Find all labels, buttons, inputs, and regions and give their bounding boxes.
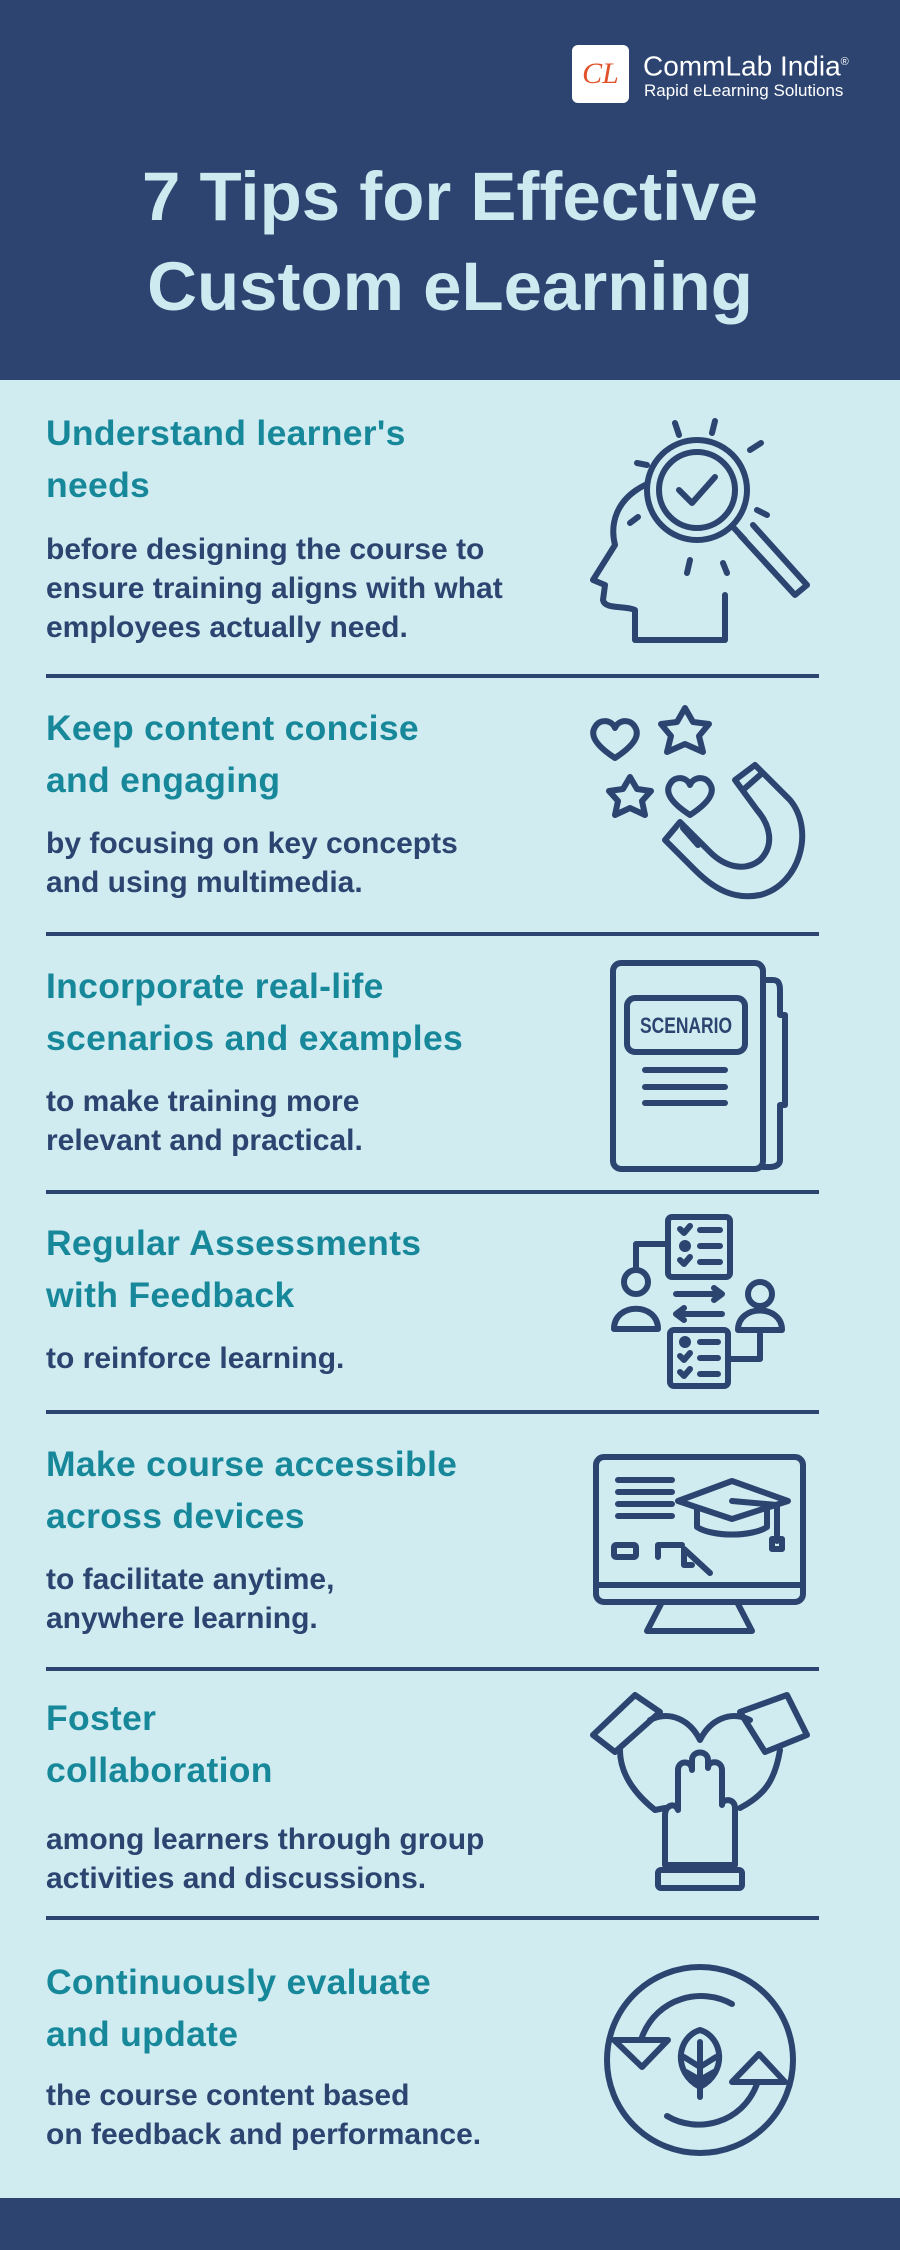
logo icon: CL bbox=[582, 57, 619, 90]
tip 2 heading: Keep content concise bbox=[46, 708, 419, 748]
tip 2 text: and using multimedia. bbox=[46, 866, 363, 899]
logo tagline: Rapid eLearning Solutions bbox=[644, 81, 843, 100]
tip 1 text: before designing the course to bbox=[46, 533, 484, 566]
tip 3 text bbox=[46, 1085, 363, 1157]
tip 5 text bbox=[46, 1563, 334, 1635]
tip 2 text: by focusing on key concepts bbox=[46, 827, 458, 860]
tip 3 heading bbox=[46, 966, 463, 1058]
logo name: CommLab India® bbox=[643, 50, 849, 81]
icon: monitor with cap bbox=[593, 1454, 806, 1634]
tip 3 text: to make training more bbox=[46, 1085, 359, 1118]
tip 1 heading: needs bbox=[46, 465, 150, 505]
title: Custom eLearning bbox=[147, 248, 753, 325]
tip 4 text: to reinforce learning. bbox=[46, 1342, 344, 1375]
tip 4 heading: with Feedback bbox=[46, 1275, 295, 1315]
tip 1 text bbox=[46, 533, 503, 644]
tip 5 text: to facilitate anytime, bbox=[46, 1563, 334, 1596]
tip 5 heading bbox=[46, 1444, 457, 1536]
title: 7 Tips for Effective bbox=[142, 158, 758, 235]
tip 1 heading bbox=[46, 413, 406, 505]
tip 6 heading: collaboration bbox=[46, 1750, 273, 1790]
tip 5 text: anywhere learning. bbox=[46, 1602, 318, 1635]
icon: assessment exchange bbox=[611, 1214, 785, 1389]
tip 4 heading: Regular Assessments bbox=[46, 1223, 421, 1263]
footer band bbox=[0, 2198, 900, 2250]
tip 6 text: activities and discussions. bbox=[46, 1862, 426, 1895]
tip 1 text: employees actually need. bbox=[46, 611, 408, 644]
header band bbox=[0, 0, 900, 380]
tip 6 heading bbox=[46, 1698, 273, 1790]
icon: update cycle with leaf bbox=[604, 1964, 796, 2156]
tip 1 text: ensure training aligns with what bbox=[46, 572, 503, 605]
tip 5 heading: Make course accessible bbox=[46, 1444, 457, 1484]
tip 7 text bbox=[46, 2079, 481, 2151]
icon: collaborating hands bbox=[590, 1692, 810, 1891]
tip 7 heading bbox=[46, 1962, 431, 2054]
tip 2 heading: and engaging bbox=[46, 760, 280, 800]
tip 2 text bbox=[46, 827, 458, 899]
tip 6 text: among learners through group bbox=[46, 1823, 484, 1856]
tip 4 heading bbox=[46, 1223, 421, 1315]
tip 6 text bbox=[46, 1823, 484, 1895]
icon: hearts stars magnet bbox=[590, 705, 806, 900]
logo bbox=[572, 45, 849, 103]
tip 5 heading: across devices bbox=[46, 1496, 305, 1536]
icon: scenario folder bbox=[610, 960, 788, 1172]
tip 3 text: relevant and practical. bbox=[46, 1124, 363, 1157]
icon: head with magnifier bbox=[590, 418, 810, 643]
tip 7 text: on feedback and performance. bbox=[46, 2118, 481, 2151]
tip 3 heading: Incorporate real-life bbox=[46, 966, 384, 1006]
tip 3 heading: scenarios and examples bbox=[46, 1018, 463, 1058]
tip 1 heading: Understand learner's bbox=[46, 413, 406, 453]
tip 7 heading: Continuously evaluate bbox=[46, 1962, 431, 2002]
tip 2 heading bbox=[46, 708, 419, 800]
icon: scenario folder: SCENARIO bbox=[640, 1013, 732, 1038]
tip 6 heading: Foster bbox=[46, 1698, 156, 1738]
logo icon bbox=[572, 45, 629, 103]
tip 7 heading: and update bbox=[46, 2014, 238, 2054]
tip 7 text: the course content based bbox=[46, 2079, 409, 2112]
title bbox=[142, 158, 758, 325]
